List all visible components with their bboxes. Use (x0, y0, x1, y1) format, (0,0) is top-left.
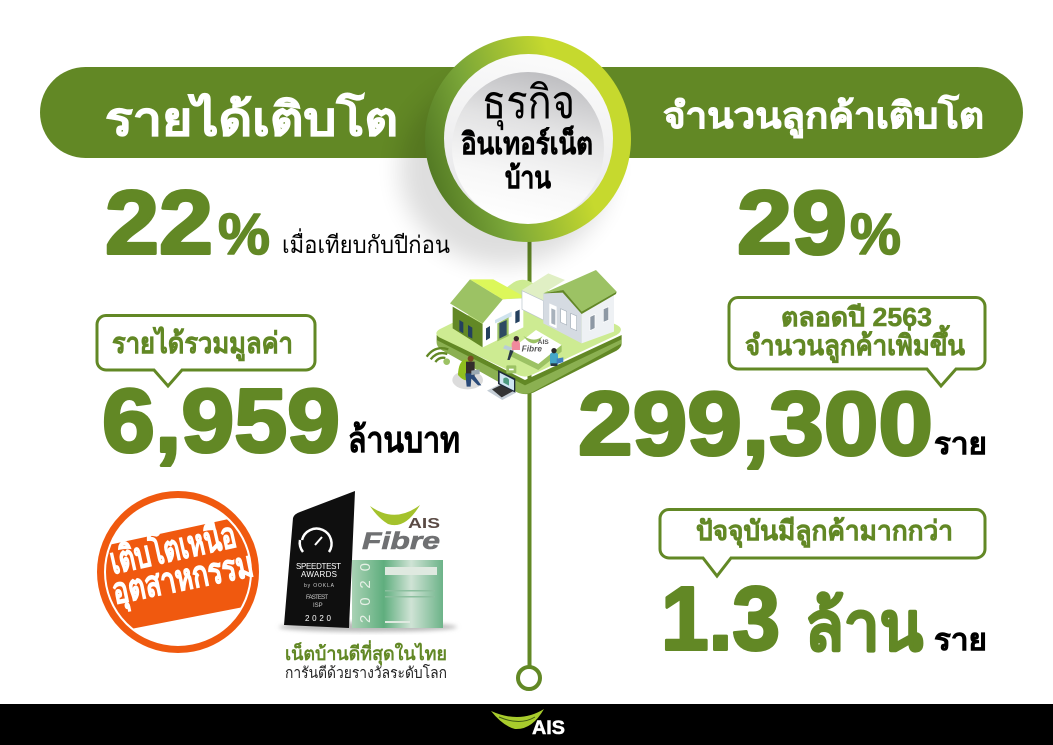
center badge: home internet business: บ้าน (505, 162, 551, 195)
customers added figure: 299,300 (578, 374, 933, 474)
center badge: home internet business (400, 36, 631, 265)
29 percent stat: 29 (737, 174, 847, 274)
current customers figure: 1.3 (661, 570, 780, 670)
revenue figure: 6,959 (102, 372, 340, 472)
callout: customers added in 2563: ตลอดปี 2563 (781, 302, 932, 332)
award: speedtest trophy and plaque: 2020 (357, 563, 374, 623)
footer bar (0, 704, 1053, 745)
logo: AIS footer (491, 709, 565, 739)
stamp: growth above industry: อุตสาหกรรม (108, 543, 257, 615)
current customers figure: ล้าน (805, 589, 923, 665)
illustration: AIS Fibre houses: Fibre (522, 344, 542, 354)
unit: customers: ราย (934, 624, 987, 657)
unit: million baht: ล้านบาท (348, 419, 460, 460)
callout: customers added in 2563: จำนวนลูกค้าเพิ่มขึ้น (745, 324, 965, 363)
stamp: growth above industry (97, 491, 259, 653)
stamp: growth above industry: เติบโตเหนือ (106, 513, 240, 582)
award: speedtest trophy and plaque: by OOKLA (304, 583, 335, 589)
logo: AIS Fibre: Fibre (362, 528, 440, 555)
award: speedtest trophy and plaque: SPEEDTEST (296, 562, 341, 571)
29 percent stat (737, 174, 901, 274)
heading: customer growth: จำนวนลูกค้าเติบโต (663, 94, 984, 139)
compared with previous year: เมื่อเทียบกับปีก่อน (282, 228, 450, 259)
center badge: home internet business: อินเทอร์เน็ต (461, 125, 593, 161)
heading: revenue growth: รายได้เติบโต (105, 92, 398, 145)
callout: total revenue: รายได้รวมมูลค่า (112, 326, 293, 361)
logo: AIS Fibre (362, 505, 440, 555)
unit: customers: ราย (934, 428, 987, 461)
22 percent stat (105, 174, 270, 274)
caption: world class award guarantee: การันตีด้วยรางวัลระดับโลก (285, 664, 447, 682)
award: speedtest trophy and plaque: 2020 (305, 614, 332, 623)
callout: current customers (660, 510, 985, 576)
award: speedtest trophy and plaque (279, 491, 457, 632)
award: speedtest trophy and plaque: ISP (313, 603, 323, 609)
callout: customers added in 2563 (729, 298, 985, 386)
22 percent stat: % (218, 202, 270, 267)
illustration: AIS Fibre houses: AIS (538, 339, 549, 346)
award: speedtest trophy and plaque: AWARDS (301, 570, 337, 579)
logo: AIS Fibre: AIS (408, 515, 440, 532)
29 percent stat: % (850, 202, 901, 267)
award: speedtest trophy and plaque: FASTEST (306, 595, 328, 601)
logo: AIS footer: AIS (532, 718, 565, 739)
current customers figure (661, 570, 923, 670)
center badge: home internet business: ธุรกิจ (482, 76, 575, 131)
illustration: AIS Fibre houses (427, 270, 622, 400)
caption: best home internet in Thailand: เน็ตบ้านดีที่สุดในไทย (285, 640, 447, 666)
callout: total revenue (97, 316, 315, 386)
center vertical timeline (518, 235, 540, 689)
callout: current customers: ปัจจุบันมีลูกค้ามากกว่า (696, 516, 953, 548)
header banner (40, 67, 1023, 158)
22 percent stat: 22 (105, 174, 213, 274)
